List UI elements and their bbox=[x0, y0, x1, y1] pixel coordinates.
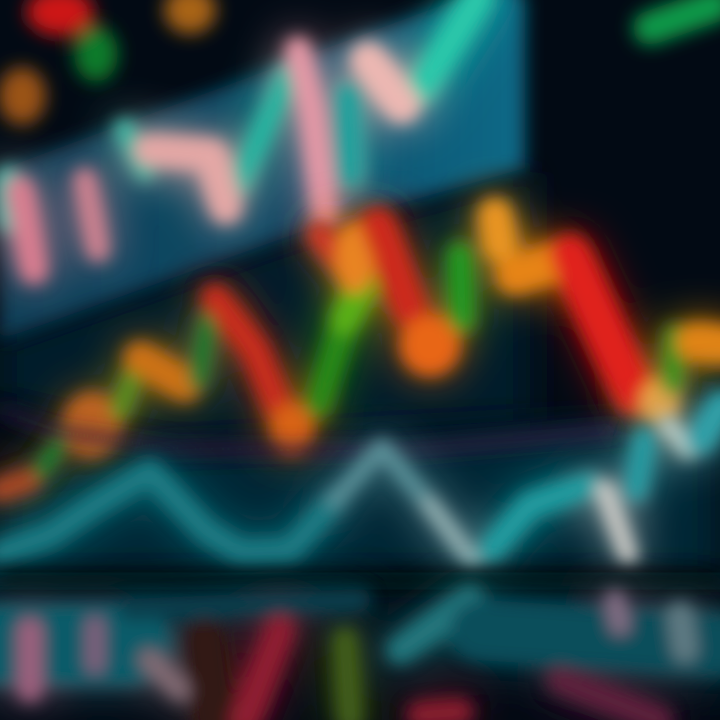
brown reflection bbox=[205, 640, 215, 720]
lower chart panel bbox=[0, 420, 720, 575]
teal rise right bbox=[490, 485, 590, 550]
green mid bbox=[460, 255, 462, 320]
white stroke bbox=[605, 490, 628, 555]
pale reflection right bbox=[615, 600, 620, 625]
maroon horizon line bbox=[0, 410, 620, 452]
orange plateau bbox=[495, 215, 500, 245]
pink zigzag bbox=[150, 150, 226, 208]
red reflection bbox=[245, 630, 280, 720]
teal reflection wash bbox=[0, 605, 130, 685]
blue chart panel bbox=[0, 0, 525, 340]
middle price line bbox=[0, 215, 720, 490]
bottom reflection bbox=[0, 600, 720, 720]
left orange and green rise bbox=[0, 480, 30, 490]
dark reflection divider bbox=[0, 572, 720, 590]
pale descent bbox=[430, 505, 472, 560]
green candle top right bbox=[650, 5, 715, 28]
pink peak right bbox=[368, 60, 402, 105]
lower teal line bbox=[0, 405, 720, 560]
pink candle second bbox=[85, 180, 98, 250]
green reflection bbox=[345, 640, 350, 720]
pink reflection left bbox=[18, 630, 42, 690]
red long descent bbox=[570, 255, 635, 395]
green rise bbox=[318, 320, 345, 405]
teal wave left bbox=[0, 472, 335, 552]
red bottom right reflection bbox=[420, 712, 460, 715]
red mid descent bbox=[378, 225, 410, 310]
green and orange right bbox=[672, 335, 675, 385]
upper price line bbox=[8, 0, 480, 270]
pale peak bbox=[335, 448, 430, 505]
orange dot left bbox=[0, 67, 46, 125]
orange peak bbox=[320, 235, 350, 270]
teal rise far right bbox=[635, 440, 645, 490]
red descent bbox=[215, 298, 280, 410]
coloured dots top bbox=[0, 0, 715, 125]
red dot bbox=[26, 0, 94, 36]
teal segments bbox=[8, 180, 12, 220]
green dot bbox=[74, 26, 118, 82]
pink candle left bbox=[20, 190, 34, 270]
tall pink stroke bbox=[298, 50, 325, 215]
orange dot top bbox=[164, 0, 216, 34]
mid haze behind red line bbox=[0, 170, 530, 440]
